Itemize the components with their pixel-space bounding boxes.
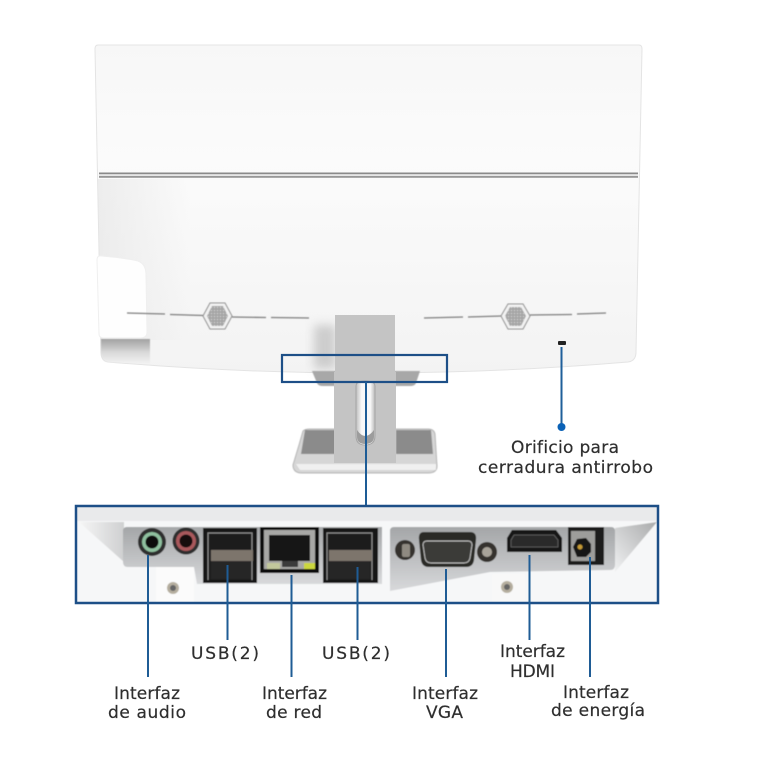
label: USB left: USB(2) bbox=[191, 644, 259, 664]
label: audio bbox=[108, 684, 186, 723]
label: audio: Interfaz bbox=[114, 684, 180, 704]
label: power: de energía bbox=[551, 701, 645, 721]
label: HDMI: HDMI bbox=[510, 662, 555, 682]
label: network bbox=[262, 684, 327, 723]
label: VGA: Interfaz bbox=[412, 684, 478, 704]
label: VGA: VGA bbox=[426, 703, 463, 723]
USB port left bbox=[203, 528, 257, 583]
label: audio: de audio bbox=[108, 703, 186, 723]
ports panel bbox=[76, 506, 658, 603]
right port plate bbox=[390, 527, 615, 591]
HDMI port bbox=[507, 530, 562, 552]
left side bump bbox=[97, 256, 150, 364]
anti-theft label bbox=[478, 438, 653, 478]
label: network: de red bbox=[266, 703, 322, 723]
right vent bbox=[424, 304, 606, 329]
neck bbox=[334, 315, 396, 463]
stand bbox=[293, 315, 437, 473]
highlight box and connector bbox=[282, 355, 447, 505]
anti-theft callout line bbox=[558, 347, 566, 431]
label: HDMI: Interfaz bbox=[500, 642, 565, 662]
lock slot bbox=[558, 341, 566, 345]
bracket bbox=[312, 371, 420, 386]
ethernet port bbox=[260, 527, 319, 573]
base bbox=[293, 429, 437, 473]
USB port right bbox=[323, 528, 378, 583]
label: power: Interfaz bbox=[563, 683, 629, 703]
label: VGA bbox=[412, 684, 478, 723]
cable slot bbox=[356, 381, 375, 445]
groove line bbox=[99, 172, 638, 178]
power port bbox=[568, 527, 604, 565]
label: power bbox=[551, 683, 645, 721]
audio red jack bbox=[172, 528, 200, 554]
label: USB right: USB(2) bbox=[322, 644, 390, 664]
left port plate bbox=[123, 527, 382, 584]
anti-theft label: Orificio para bbox=[511, 438, 619, 458]
leader lines bbox=[148, 555, 590, 677]
VGA port bbox=[395, 532, 497, 567]
left vent bbox=[127, 303, 309, 329]
label: network: Interfaz bbox=[262, 684, 327, 704]
label: HDMI bbox=[500, 642, 565, 682]
monitor back bbox=[95, 45, 642, 373]
audio green jack bbox=[138, 528, 166, 556]
screws bbox=[167, 581, 513, 594]
anti-theft label: cerradura antirrobo bbox=[478, 458, 653, 478]
